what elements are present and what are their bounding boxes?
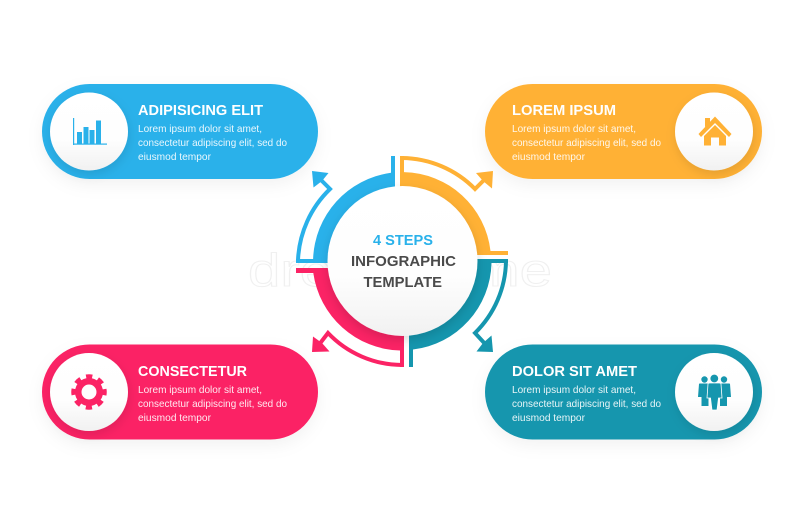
text block: consectetur adipiscing elit, sed do: [138, 398, 287, 410]
text block: eiusmod tempor: [138, 151, 211, 163]
segment: pink arc and arrow: [296, 268, 404, 367]
segment: teal arc and arrow: [400, 259, 508, 367]
center title: TEMPLATE: [364, 274, 442, 291]
heading: DOLOR SIT AMET: [512, 363, 637, 380]
segment: yellow arc and arrow: [400, 156, 508, 255]
icon: house: [675, 92, 753, 170]
text block: Lorem ipsum dolor sit amet,: [512, 123, 636, 135]
text block: eiusmod tempor: [512, 151, 585, 163]
icon: bar chart: [50, 92, 128, 170]
panel: adipisicing elit: [42, 84, 318, 179]
center title: [351, 232, 456, 291]
panel: dolor sit amet: [485, 344, 762, 440]
text block: eiusmod tempor: [138, 412, 211, 424]
heading: LOREM IPSUM: [512, 102, 616, 119]
heading: ADIPISICING ELIT: [138, 102, 263, 119]
watermark: dreamstime: [248, 244, 552, 296]
text block: [512, 384, 661, 424]
segment: blue arc and arrow: [296, 156, 395, 263]
text block: [138, 123, 287, 163]
center title: INFOGRAPHIC: [351, 253, 456, 270]
center circle: [328, 186, 478, 336]
text block: Lorem ipsum dolor sit amet,: [512, 384, 636, 396]
text block: [138, 384, 287, 424]
center title: 4 STEPS: [373, 232, 433, 249]
icon: people: [675, 353, 753, 431]
text block: consectetur adipiscing elit, sed do: [512, 398, 661, 410]
text block: Lorem ipsum dolor sit amet,: [138, 123, 262, 135]
text block: eiusmod tempor: [512, 412, 585, 424]
text block: [512, 123, 661, 163]
icon: gear: [50, 353, 128, 431]
text block: consectetur adipiscing elit, sed do: [512, 137, 661, 149]
text block: Lorem ipsum dolor sit amet,: [138, 384, 262, 396]
text block: consectetur adipiscing elit, sed do: [138, 137, 287, 149]
heading: CONSECTETUR: [138, 363, 247, 380]
panel: consectetur: [42, 344, 318, 440]
panel: lorem ipsum: [485, 84, 762, 179]
